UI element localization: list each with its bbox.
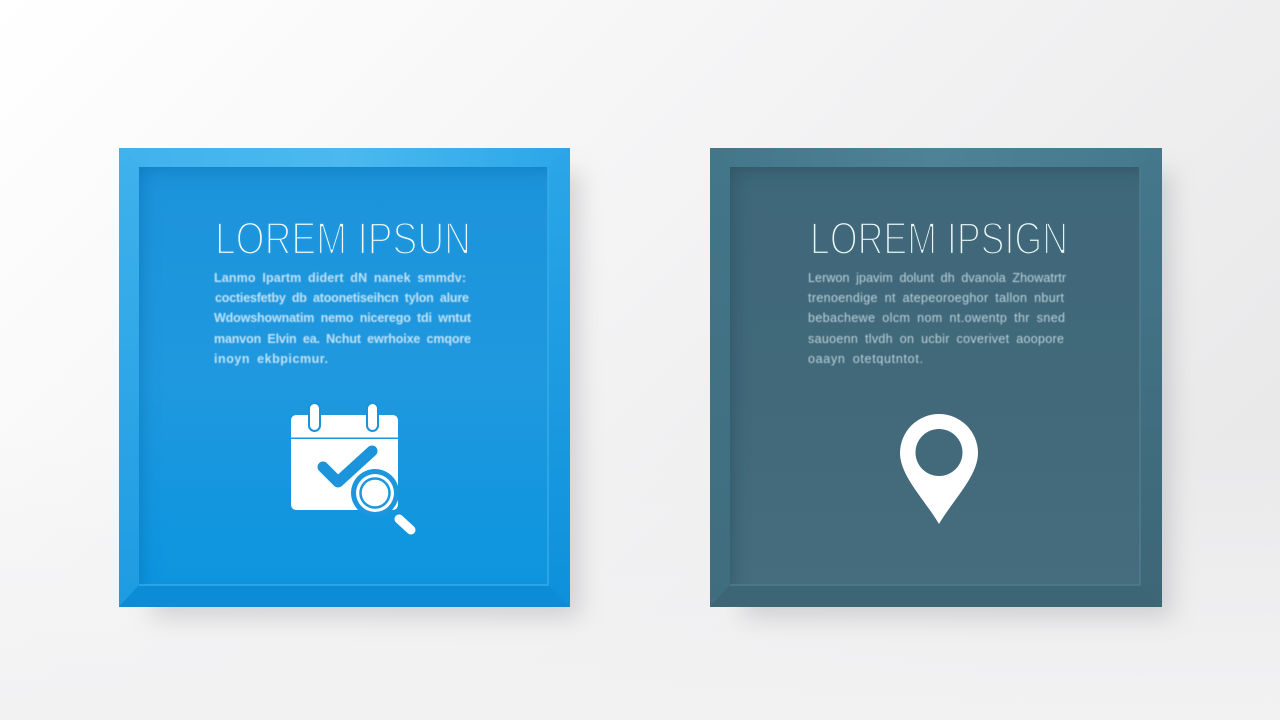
panel: left blue card	[119, 148, 580, 618]
body text: Lanmo Ipartm didert dN nanek smmdv:	[214, 271, 466, 285]
body text	[214, 271, 472, 366]
body text: manvon Elvin ea. Nchut ewrhoixe cmqore	[214, 332, 471, 346]
body text: oaayn otetqutntot.	[808, 352, 923, 366]
heading: LOREM IPSIGN	[810, 213, 1068, 264]
body text: inoyn ekbpicmur.	[214, 352, 328, 366]
heading: LOREM IPSUN	[215, 213, 471, 264]
body text: bebachewe olcm nom nt.owentp thr sned	[808, 311, 1065, 325]
panel: right slate card	[710, 148, 1172, 618]
body text: sauoenn tlvdh on ucbir coverivet aoopore	[808, 332, 1064, 346]
card shadow	[743, 172, 1172, 618]
body text: Wdowshownatim nemo nicerego tdi wntut	[214, 311, 472, 325]
card shadow	[152, 172, 580, 618]
frame	[119, 148, 570, 607]
body text	[808, 271, 1066, 366]
body text: trenoendige nt atepeoroeghor tallon nburt	[808, 291, 1065, 305]
frame	[710, 148, 1162, 607]
body text: coctiesfetby db atoonetiseihcn tylon alure	[215, 291, 469, 305]
body text: Lerwon jpavim dolunt dh dvanola Zhowatrtr	[808, 271, 1066, 285]
icon: map pin	[900, 414, 978, 524]
icon: calendar check with magnifier	[291, 403, 411, 530]
